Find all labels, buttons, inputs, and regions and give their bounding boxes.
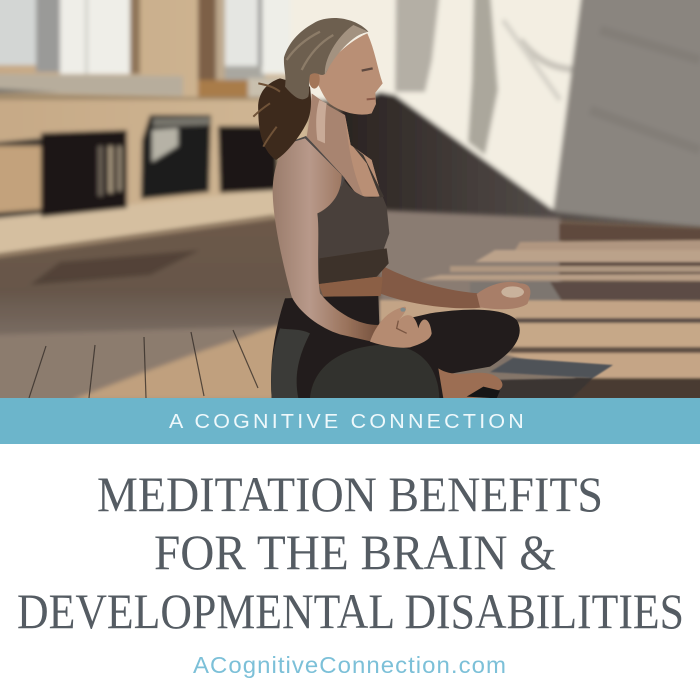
pants [271,296,520,398]
woman in meditation pose [253,18,530,398]
near hand mudra [370,307,432,348]
neck and chest [307,93,382,197]
teal banner [0,398,700,444]
yoga mat [490,358,613,400]
banner text: A COGNITIVE CONNECTION [169,411,527,433]
foot [438,368,502,398]
wooden floor [0,210,700,410]
near knee [310,345,439,398]
sun streaks on floor [380,224,700,400]
crop top [293,136,389,284]
hair and ponytail [253,18,368,160]
title: FOR THE BRAIN & [154,524,556,580]
far arm [380,266,483,308]
title [17,466,684,639]
midriff [318,277,383,297]
title: MEDITATION BENEFITS [97,466,603,522]
far hand mudra [477,282,530,309]
ear and face [309,33,383,115]
floor plank seams [29,330,258,398]
near arm and back [273,138,378,342]
photo: woman meditating in a sunlit studio [0,0,700,410]
sunlit wall on right [290,0,585,212]
studio background [0,0,700,260]
website link: ACognitiveConnection.com [193,652,507,678]
